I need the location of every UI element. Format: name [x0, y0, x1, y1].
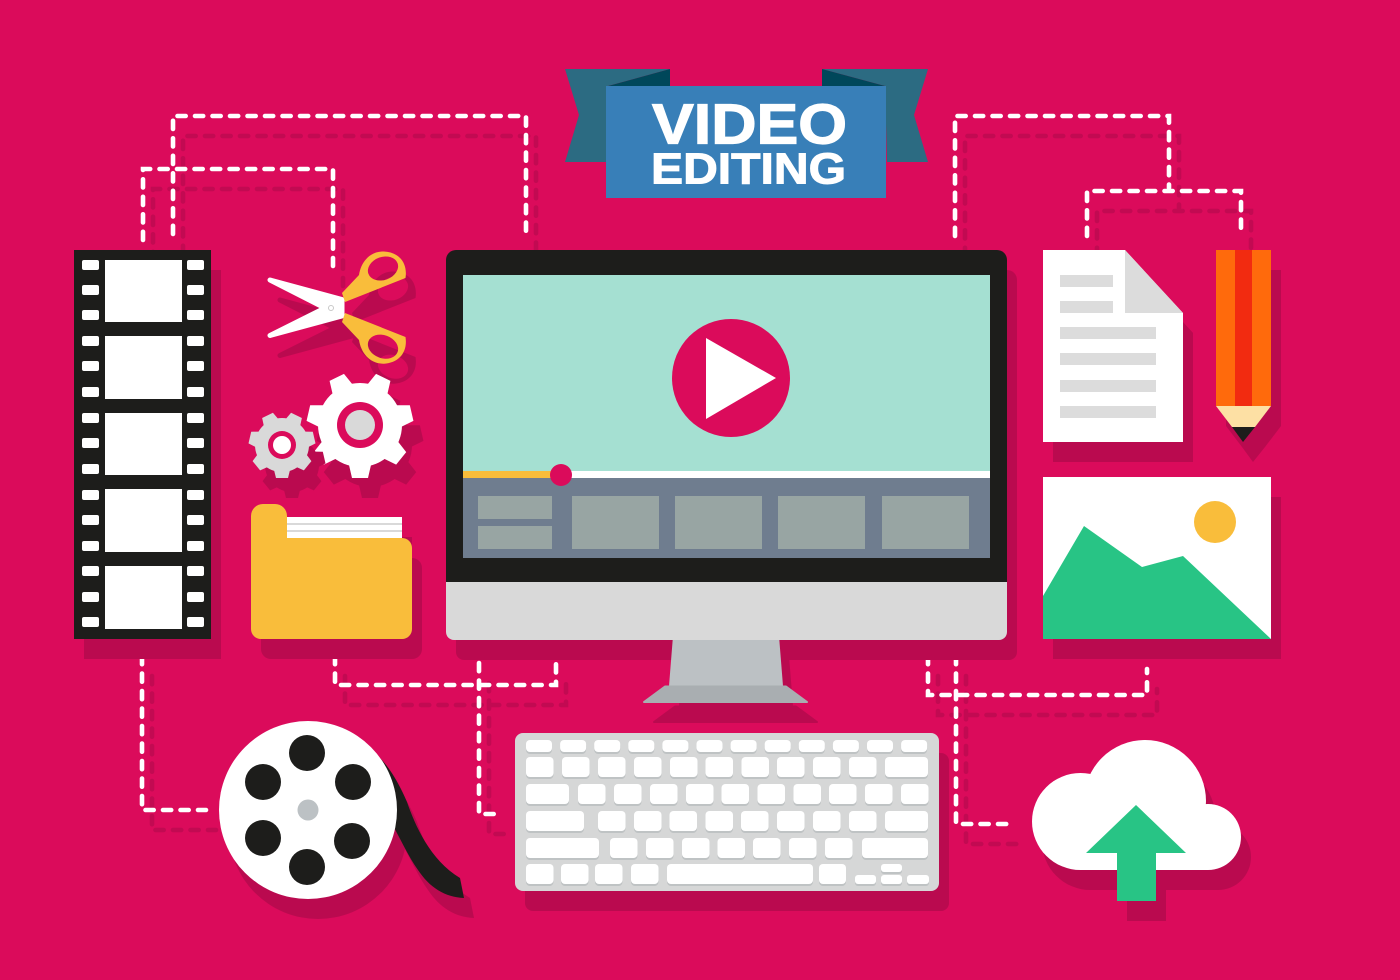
progress handle: [550, 464, 572, 486]
icon: cloud upload: [1032, 740, 1241, 901]
banner ribbon right tail: [822, 69, 928, 162]
title: VIDEO: VIDEO: [652, 92, 847, 156]
monitor chin: [446, 560, 1007, 640]
icon: small gear: [248, 412, 316, 478]
screen: [463, 275, 990, 471]
monitor: [446, 250, 1007, 702]
title: EDITING: EDITING: [651, 144, 846, 194]
progress fill: [463, 471, 553, 478]
film strip: [74, 250, 211, 639]
banner ribbon left fold: [608, 69, 670, 86]
play button: [672, 319, 790, 437]
film reel: [219, 721, 464, 899]
banner main panel: [606, 86, 886, 198]
document: [1043, 250, 1183, 442]
image placeholder: [1043, 477, 1271, 639]
dashed connector lines: [142, 116, 1241, 824]
icon: folder: [251, 504, 412, 639]
reel hub: [298, 800, 318, 820]
keyboard: [515, 733, 939, 891]
banner ribbon right fold: [822, 69, 885, 86]
timeline panel: [463, 478, 990, 558]
film ribbon: [380, 758, 464, 898]
icon: pencil: [1216, 250, 1271, 442]
reel holes: [245, 735, 371, 885]
icon: scissors: [270, 251, 406, 364]
monitor bezel: [446, 250, 1007, 582]
banner ribbon left tail: [565, 69, 670, 162]
monitor stand: [669, 636, 783, 686]
icon: large gear: [306, 373, 414, 478]
timeline clips: [478, 496, 969, 549]
reel disc: [219, 721, 397, 899]
title banner: [565, 69, 928, 198]
progress track: [463, 471, 990, 478]
monitor stand base: [644, 686, 807, 702]
